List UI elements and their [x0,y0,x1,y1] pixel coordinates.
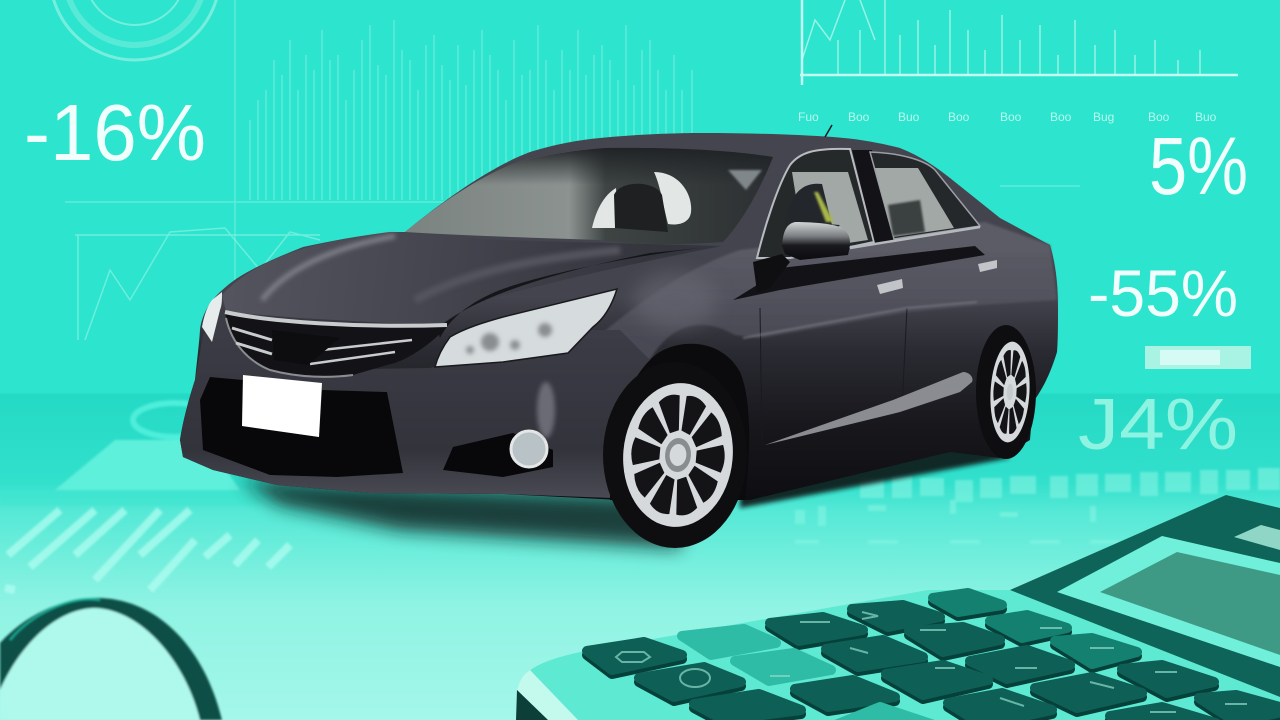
chart axis labels: Buo [898,110,920,124]
windshield [405,148,773,244]
calculator light keys [682,629,943,720]
hood [222,232,722,326]
car [180,125,1058,548]
percentage: -16%: -16% [24,88,206,177]
decorative background bar chart [65,0,1080,300]
grille emblem [272,330,340,365]
percentage: -55%: -55% [1088,256,1238,330]
chart axis labels: Boo [1148,110,1170,124]
chart axis labels: Boo [848,110,870,124]
grille chrome [225,312,447,377]
floor pattern left [0,403,290,590]
fog light recess [443,433,553,477]
fender highlight [633,272,717,328]
chart axis labels: Boo [948,110,970,124]
calculator body [517,590,1280,720]
body side line [743,302,977,338]
license plate [242,375,322,437]
chart axis labels: Bug [1093,110,1114,124]
front wheel [603,362,747,548]
B pillar [852,150,894,243]
bumper highlight [537,382,555,438]
car body silhouette [180,133,1058,500]
floor pattern right [795,468,1280,544]
side molding [765,372,973,445]
door seam lines [760,308,907,440]
body crease shadow [733,246,985,300]
small progress bar [1145,346,1251,369]
calculator edge [517,670,578,720]
chart axis labels: Boo [1050,110,1072,124]
calculator display [1100,552,1280,655]
hood highlights [262,236,620,300]
percentage: 5%: 5% [1149,121,1248,212]
rear wheel [976,325,1036,459]
door handles [877,260,997,294]
calculator key shadows [587,597,1280,720]
chart axis labels: Fuo [798,110,819,124]
line chart top right [800,0,1238,85]
solar panel [1234,525,1280,550]
headlight detail [466,323,552,354]
front bumper [180,313,650,498]
chart axis labels [798,110,1217,124]
calculator key marks [616,612,1247,712]
decorative rings top left [50,0,220,60]
side upper panel [600,222,1057,360]
chart axis labels: Buo [1195,110,1217,124]
magnifier ring [0,598,222,720]
hood crease [437,248,700,338]
decorative line chart lower left [75,228,320,340]
grille [225,313,447,376]
front side window [757,149,874,258]
belt chrome [850,227,980,248]
faded percentage: 14%: J4% [1078,385,1238,465]
calculator medium keys [933,593,1137,664]
calculator display frame [1057,536,1280,667]
main headlight [435,289,617,367]
interior seats [592,170,762,232]
chart axis labels: Boo [1000,110,1022,124]
antenna [825,125,832,137]
mirror base [753,254,790,292]
mirror [782,222,850,260]
fog light [511,431,547,467]
lower bumper intake [200,377,403,477]
calculator dark housing [1010,495,1280,697]
front wheel arch [610,344,749,500]
calculator dark keys [587,605,1280,720]
calculator [516,495,1280,720]
ground shadow [240,435,1010,548]
rear side window [870,152,980,239]
left headlight [202,292,222,342]
